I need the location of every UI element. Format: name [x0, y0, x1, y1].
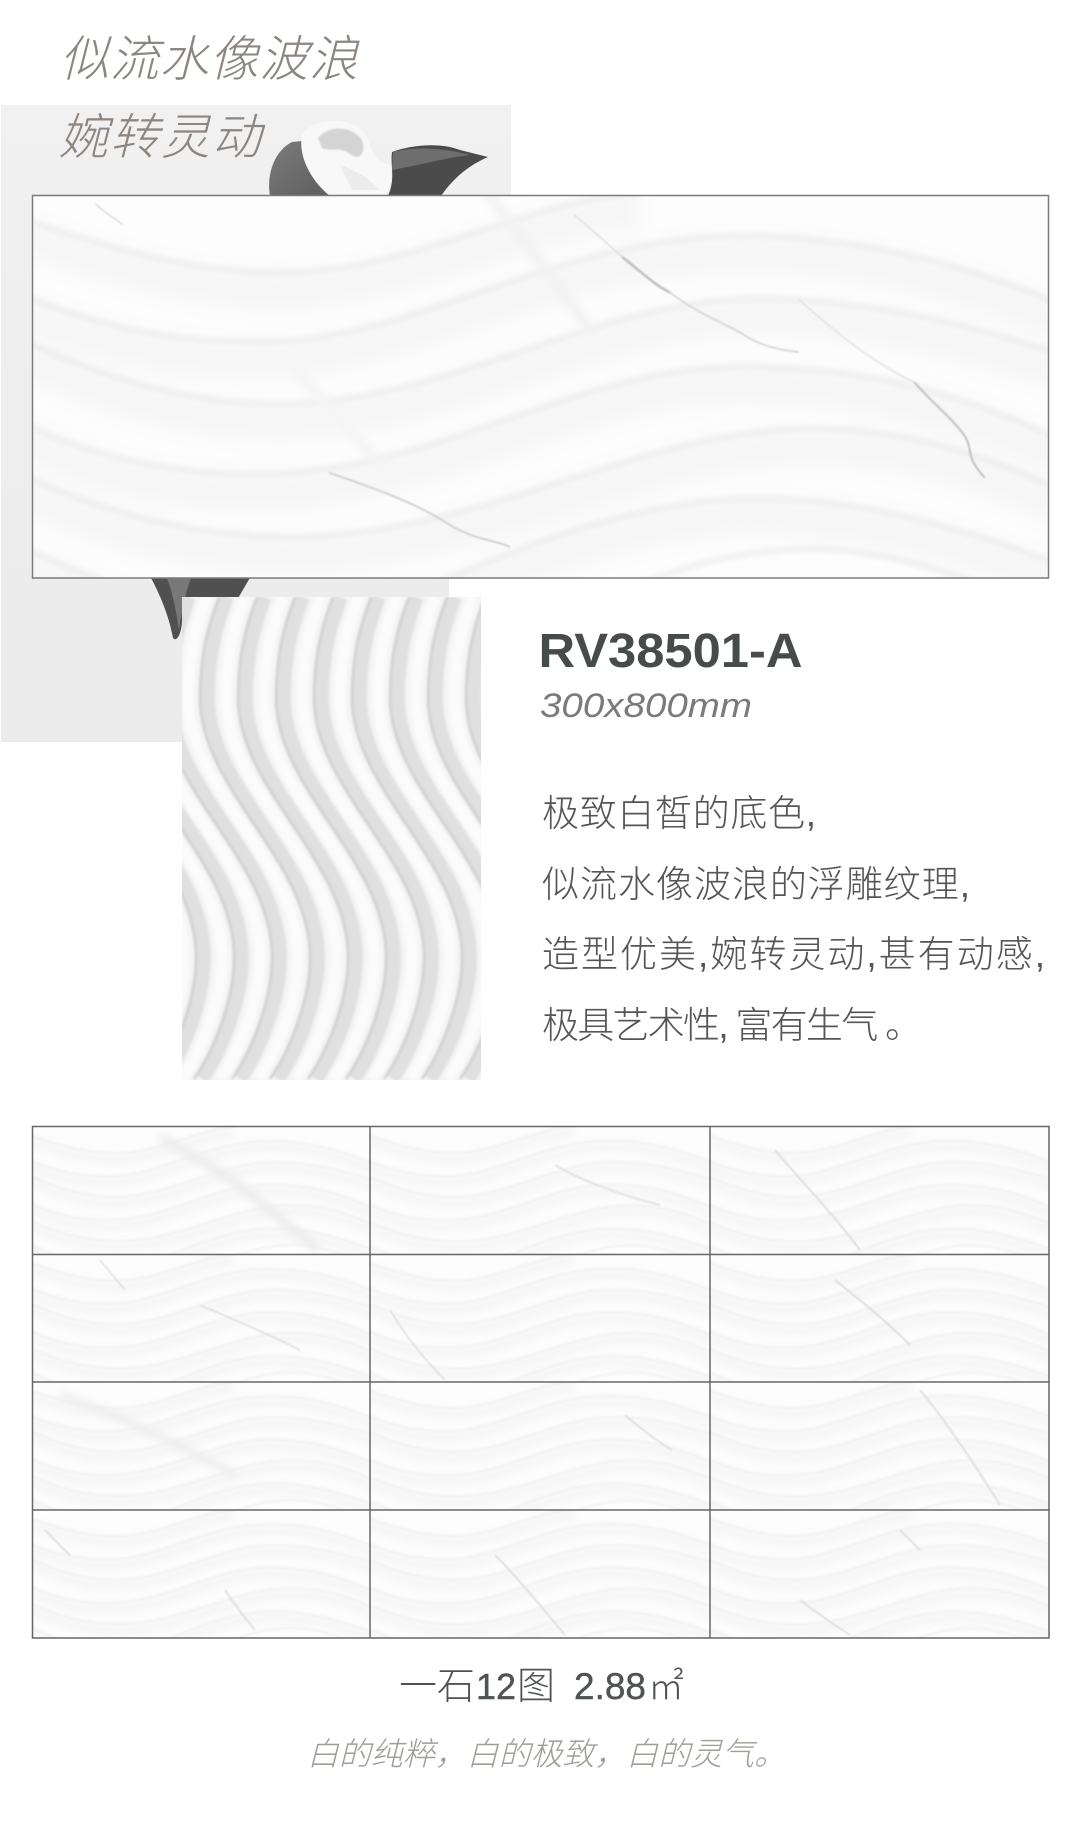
spec caption: 图	[517, 1666, 555, 1708]
title	[59, 33, 360, 165]
panel: vertical wave relief tile	[182, 597, 481, 1080]
tile row 1 column 3	[706, 1127, 1054, 1269]
tile row 2 column 2	[367, 1255, 712, 1396]
spec caption: 2.88	[574, 1666, 646, 1707]
title: 婉转灵动	[59, 111, 266, 165]
description text	[542, 793, 1045, 1046]
tile row 1 column 1	[29, 1127, 374, 1268]
description text: 极具艺术性, 富有生气 。	[542, 1005, 922, 1046]
description text: 造型优美,婉转灵动,甚有动感,	[542, 934, 1045, 975]
panel border	[32, 196, 1048, 578]
tagline: 白的纯粹，白的极致，白的灵气。	[307, 1736, 786, 1772]
panel: 12-tile grid	[29, 1126, 1054, 1652]
spec caption	[399, 1666, 684, 1708]
tile row 4 column 2	[366, 1510, 714, 1652]
product size: 300x800mm	[540, 687, 752, 725]
description text: 极致白皙的底色,	[542, 793, 816, 834]
product code: RV38501-A	[538, 625, 802, 678]
tile row 1 column 2	[366, 1127, 714, 1269]
tile row 3 column 3	[706, 1382, 1054, 1524]
grey backdrop panel	[1, 105, 511, 742]
title: 似流水像波浪	[60, 33, 360, 87]
tile row 3 column 1	[29, 1382, 374, 1523]
tile row 2 column 3	[707, 1255, 1052, 1396]
panel: large wave tile	[20, 194, 1059, 620]
spec caption: ㎡	[648, 1666, 684, 1707]
spec caption: 12	[476, 1666, 516, 1707]
icon: rose with leaves	[269, 121, 488, 196]
grid lines	[32, 1126, 1049, 1638]
tile row 4 column 1	[29, 1510, 374, 1651]
tile row 3 column 2	[366, 1382, 714, 1524]
icon: leaf below panel	[150, 576, 251, 639]
description text: 似流水像波浪的浮雕纹理,	[542, 864, 970, 905]
spec caption: 一石	[399, 1666, 475, 1708]
tile row 2 column 1	[29, 1255, 374, 1396]
tile row 4 column 3	[706, 1510, 1054, 1652]
